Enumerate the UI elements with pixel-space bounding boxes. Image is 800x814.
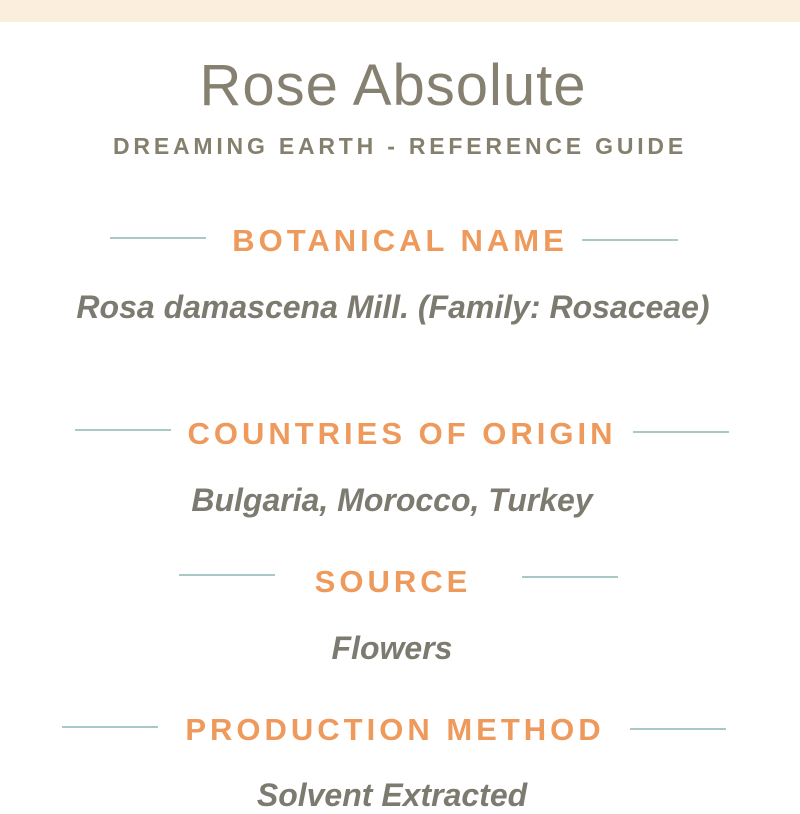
text: botanical name: Rosa damascena Mill. (Family: Rosaceae): [76, 289, 710, 325]
text: countries: Bulgaria, Morocco, Turkey: [191, 482, 593, 518]
section: source: [179, 564, 618, 666]
section: countries: [75, 416, 729, 518]
subtitle: DREAMING EARTH - REFERENCE GUIDE: [113, 133, 687, 159]
heading: countries: COUNTRIES OF ORIGIN: [187, 416, 617, 451]
text: production method: Solvent Extracted: [257, 777, 527, 813]
heading: botanical name: BOTANICAL NAME: [232, 223, 568, 258]
top band: [0, 0, 800, 22]
title: Rose Absolute: [199, 53, 587, 118]
section: botanical name: [76, 223, 710, 325]
section: production method: [62, 712, 726, 813]
heading: production method: PRODUCTION METHOD: [185, 712, 605, 747]
heading: source: SOURCE: [315, 564, 471, 599]
text: source: Flowers: [332, 630, 452, 666]
